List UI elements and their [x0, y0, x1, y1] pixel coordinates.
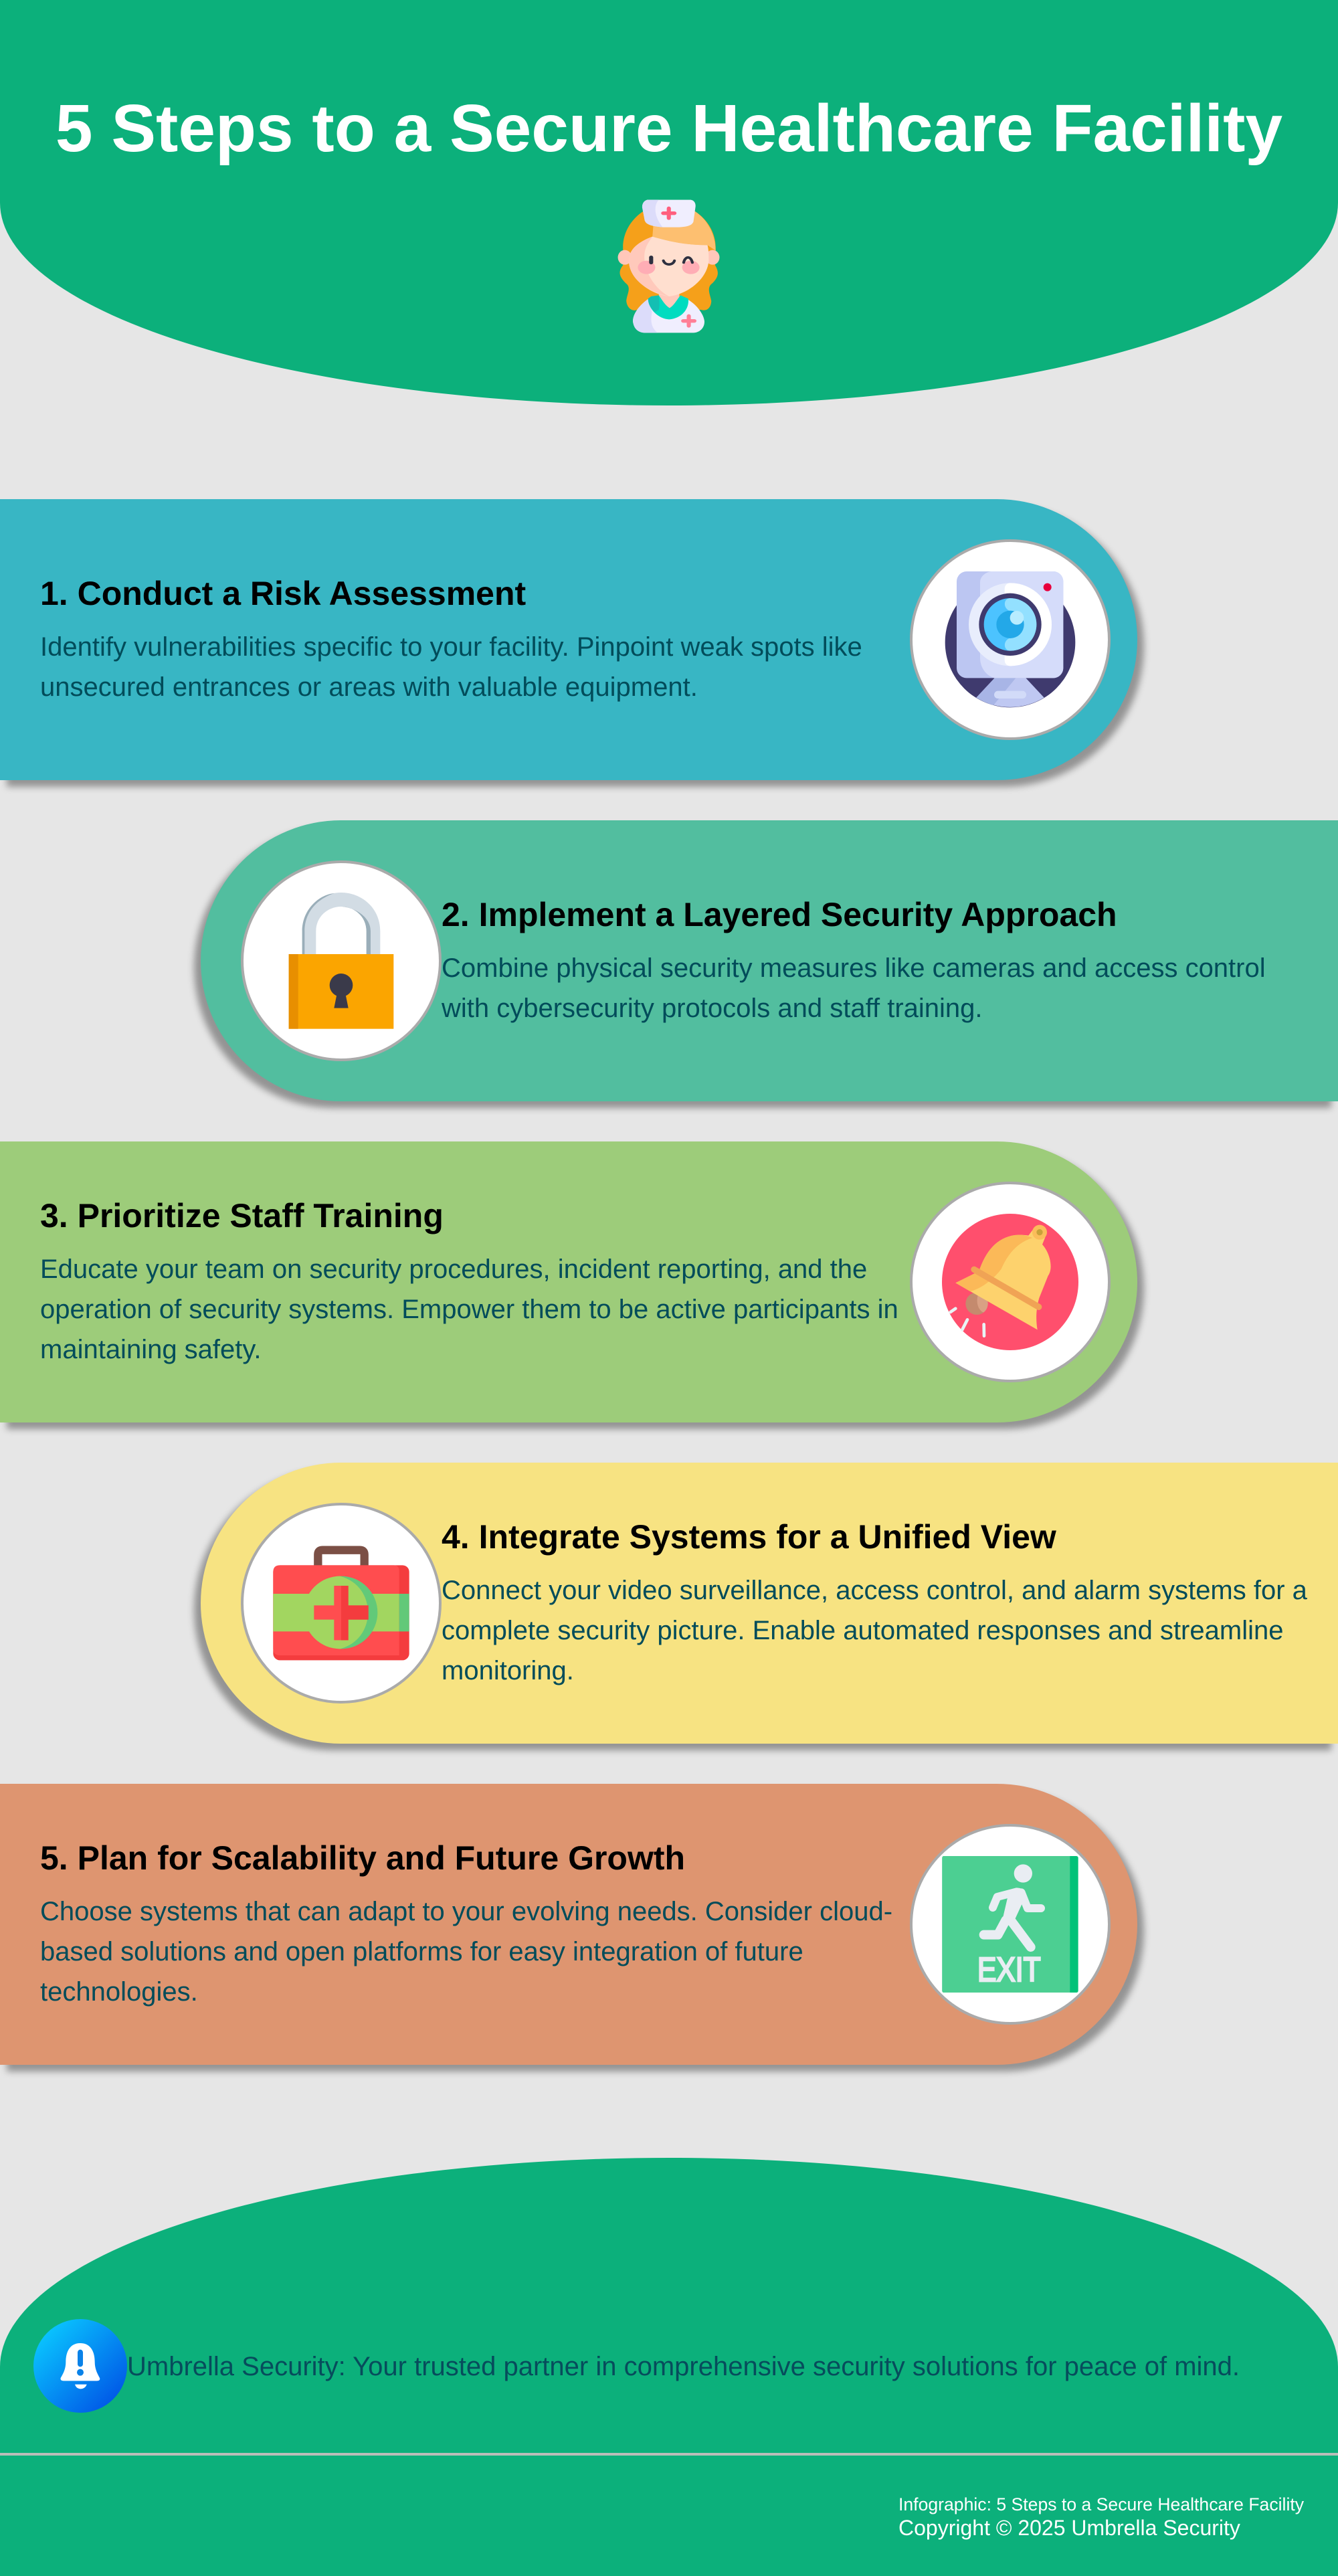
- step 2 text: Combine physical security measures like cameras and access control: [442, 953, 1266, 983]
- step 1 text: unsecured entrances or areas with valuable equipment.: [40, 672, 698, 702]
- step 4 heading: 4. Integrate Systems for a Unified View: [442, 1518, 1056, 1556]
- title: 5 Steps to a Secure Healthcare Facility: [56, 91, 1282, 166]
- icon: alarm bell: [910, 1182, 1111, 1382]
- step 2 text: with cybersecurity protocols and staff training.: [442, 994, 983, 1023]
- step 3 text: operation of security systems. Empower them to be active participants in: [40, 1295, 898, 1324]
- step 1 heading: 1. Conduct a Risk Assessment: [40, 575, 526, 612]
- footer tagline: Umbrella Security: Your trusted partner in comprehensive security solutions for peace of mind.: [127, 2352, 1240, 2381]
- icon: padlock: [241, 860, 442, 1061]
- icon: notification bell: [33, 2319, 127, 2413]
- icon: nurse: [618, 199, 720, 333]
- panel: step 1: [0, 499, 1137, 780]
- step 1 text: [40, 632, 862, 702]
- icon: first aid kit: [241, 1503, 442, 1704]
- icon: exit sign: EXIT: [977, 1950, 1041, 1989]
- step 3 text: Educate your team on security procedures, incident reporting, and the: [40, 1255, 867, 1284]
- step 3 heading: 3. Prioritize Staff Training: [40, 1197, 444, 1234]
- step 4 text: complete security picture. Enable automated responses and streamline: [442, 1616, 1283, 1645]
- step 1 text: Identify vulnerabilities specific to your facility. Pinpoint weak spots like: [40, 632, 862, 662]
- step 5 text: based solutions and open platforms for easy integration of future: [40, 1937, 803, 1966]
- step 2 heading: 2. Implement a Layered Security Approach: [442, 896, 1117, 933]
- footer credits: Infographic: 5 Steps to a Secure Healthcare Facility: [898, 2494, 1304, 2514]
- panel: step 2: [201, 820, 1338, 1101]
- step 5 heading: 5. Plan for Scalability and Future Growth: [40, 1839, 685, 1877]
- icon: exit sign: [910, 1824, 1111, 2025]
- step 4 text: Connect your video surveillance, access control, and alarm systems for a: [442, 1576, 1307, 1605]
- step 5 text: [40, 1897, 892, 2007]
- footer credits: Copyright © 2025 Umbrella Security: [898, 2516, 1240, 2540]
- step 3 text: [40, 1255, 898, 1364]
- footer banner: [0, 2158, 1338, 2576]
- step 3 text: maintaining safety.: [40, 1335, 262, 1364]
- panel: step 4: [201, 1463, 1338, 1744]
- header banner: [0, 0, 1338, 405]
- icon: security camera: [910, 539, 1111, 740]
- step 5 text: technologies.: [40, 1977, 198, 2007]
- step 5 text: Choose systems that can adapt to your evolving needs. Consider cloud-: [40, 1897, 892, 1926]
- panel: step 5: [0, 1784, 1137, 2065]
- panel: step 3: [0, 1141, 1137, 1422]
- step 4 text: [442, 1576, 1307, 1685]
- footer credits: [898, 2494, 1304, 2540]
- step 4 text: monitoring.: [442, 1656, 574, 1685]
- step 2 text: [442, 953, 1266, 1023]
